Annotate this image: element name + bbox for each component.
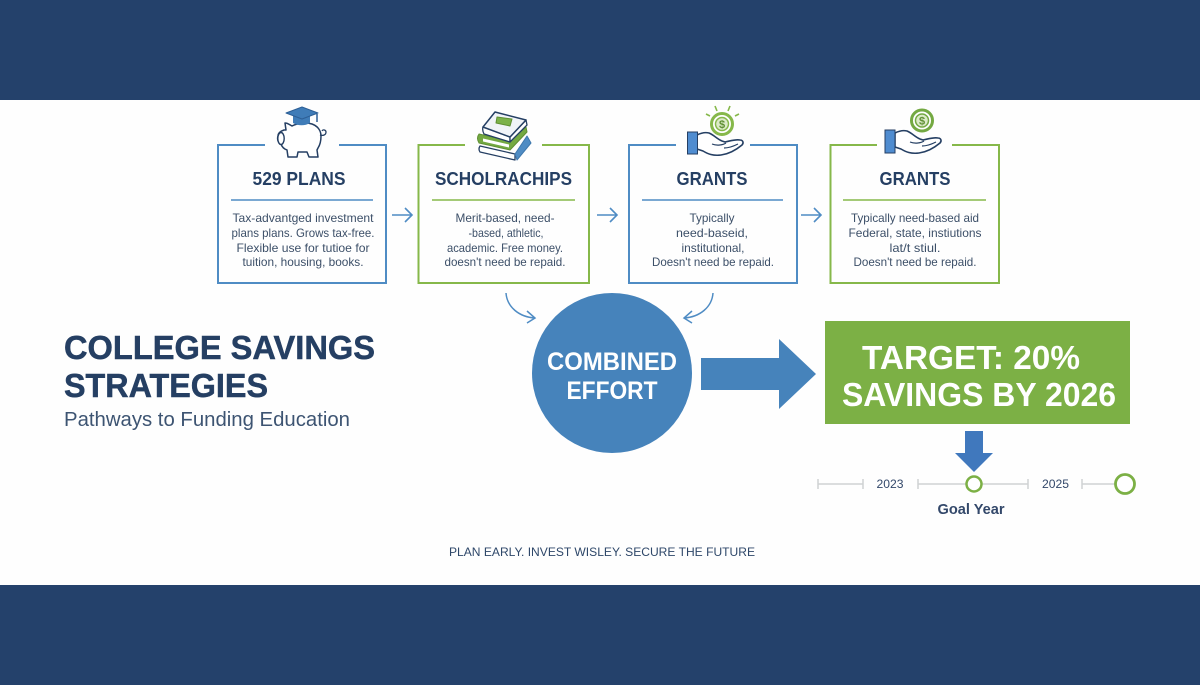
title: COLLEGE SAVINGS: [64, 330, 375, 367]
text: second grants description: Typically need-based aid: [851, 211, 979, 225]
text: second grants description: Federal, state, instiutions: [848, 226, 982, 240]
text: second grants description: Doesn't need be repaid.: [854, 255, 976, 269]
text: 529 description: [232, 211, 374, 269]
icon: hand with coin: $: [919, 116, 925, 128]
text: scholarship description: doesn't need be repaid.: [444, 255, 566, 269]
bottom banner: [0, 585, 1200, 685]
arrow: curved left into circle: [506, 293, 535, 323]
title: [64, 330, 375, 405]
text: grants description: Doesn't need be repaid.: [652, 255, 774, 269]
subtitle: Pathways to Funding Education: [64, 409, 350, 431]
target callout: SAVINGS BY 2026: [842, 376, 1116, 413]
text: scholarship description: -based, athletic,: [468, 226, 544, 240]
top banner: [0, 0, 1200, 100]
text: scholarship description: [444, 211, 566, 269]
icon: hand with coin: [885, 110, 941, 153]
target callout: [825, 321, 1130, 424]
text: 529 description: Tax-advantged investment: [232, 211, 374, 225]
panel: grants: [629, 106, 797, 283]
text: 529 description: plans plans. Grows tax-free.: [232, 226, 374, 240]
text: 529 description: Flexible use for tutioe for: [236, 241, 370, 255]
arrow: 529 to scholarships: [392, 208, 412, 222]
arrow: circle to target: [701, 339, 816, 409]
timeline: 2023: [876, 477, 904, 491]
combined effort circle: COMBINED: [547, 348, 677, 376]
icon: hand with glowing coin: [688, 106, 743, 155]
text: grants description: Typically: [690, 211, 734, 225]
arrow: scholarships to grants: [597, 208, 617, 222]
heading: 529 plans: 529 PLANS: [252, 169, 346, 189]
text: scholarship description: Merit-based, need-: [456, 211, 555, 225]
text: second grants description: lat/t stiul.: [890, 241, 940, 255]
label: goal year: Goal Year: [938, 501, 1005, 518]
arrow: target to timeline: [955, 431, 993, 472]
arrow: curved right into circle: [684, 293, 713, 323]
panel: scholarships: [418, 112, 589, 283]
combined effort circle: [532, 293, 692, 453]
text: second grants description: [848, 211, 982, 269]
text: grants description: [652, 211, 774, 269]
target callout: TARGET: 20%: [862, 339, 1080, 376]
heading: scholrachips: SCHOLRACHIPS: [435, 169, 572, 189]
icon: piggy bank with graduation cap: [278, 107, 326, 157]
footer tagline: PLAN EARLY. INVEST WISLEY. SECURE THE FUTURE: [449, 545, 755, 559]
text: 529 description: tuition, housing, books.: [242, 255, 364, 269]
icon: stack of books: [478, 112, 531, 160]
text: grants description: need-baseid,: [676, 226, 748, 240]
timeline: 2025: [1042, 477, 1069, 491]
arrow: grants to grants: [801, 208, 821, 222]
combined effort circle: EFFORT: [566, 377, 658, 405]
panel: 529 plans: [218, 107, 386, 283]
text: grants description: institutional,: [682, 241, 744, 255]
title: STRATEGIES: [64, 368, 268, 405]
timeline: [818, 474, 1134, 518]
icon: hand with glowing coin: $: [719, 119, 725, 131]
text: scholarship description: academic. Free money.: [447, 241, 563, 255]
panel: grants second: [830, 110, 999, 283]
heading: grants second: GRANTS: [880, 169, 950, 189]
heading: grants: GRANTS: [676, 169, 748, 189]
